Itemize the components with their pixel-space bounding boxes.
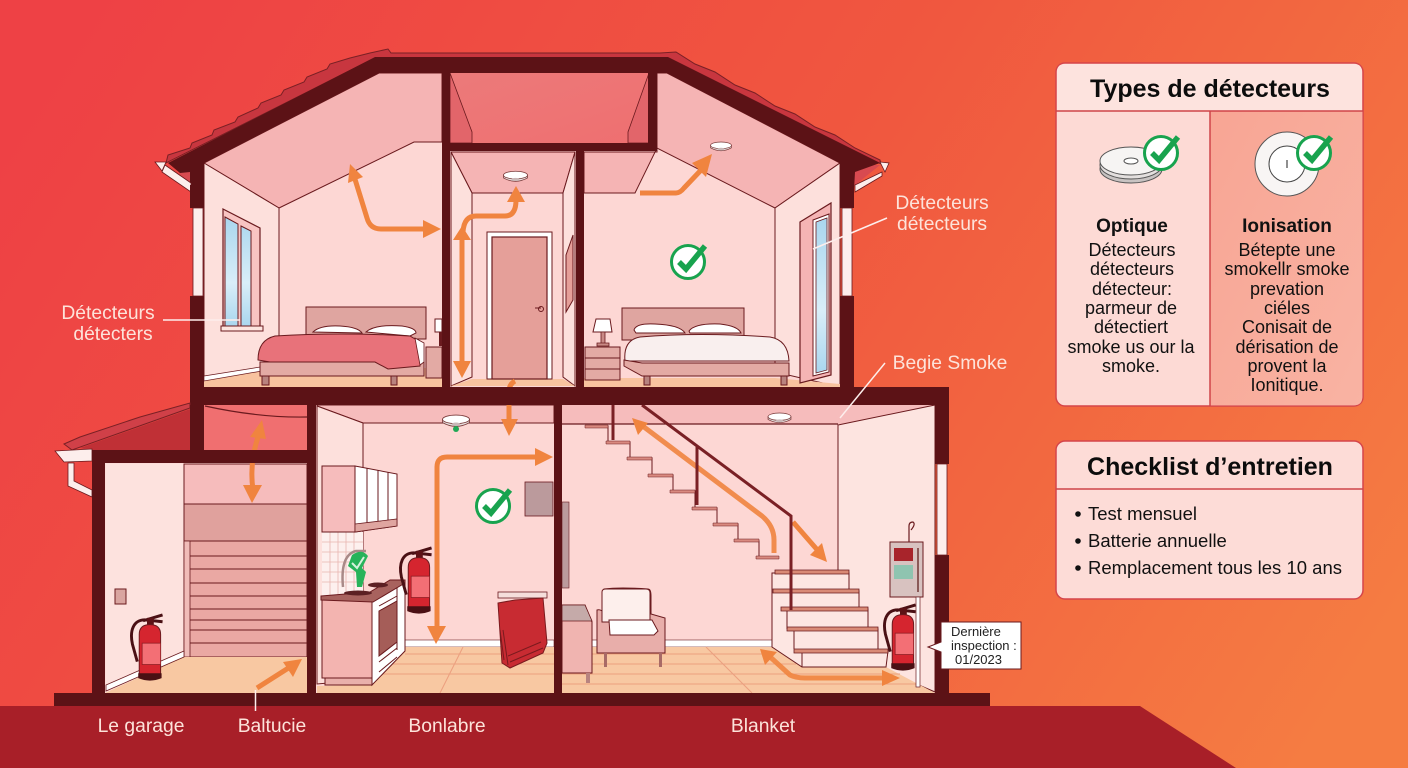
- label: bonlabre: Bonlabre: [408, 716, 486, 737]
- heading background: [1057, 64, 1362, 111]
- smoke detector hallway: [503, 171, 528, 181]
- upper left air flow arrow: [348, 164, 441, 238]
- icon: optical detector: [1100, 136, 1178, 183]
- towel rack and blanket: [498, 592, 547, 668]
- leader line left: [163, 319, 240, 321]
- column text: ionisation: [1224, 216, 1350, 395]
- side unit: [562, 502, 592, 683]
- column text: optique: smoke us our la: [1067, 337, 1196, 357]
- tiles: [322, 532, 363, 598]
- wall box: [525, 482, 553, 516]
- inner walls upper: [442, 60, 657, 387]
- panel: types de détecteurs: [1056, 63, 1363, 406]
- smoke detector living: [768, 413, 791, 423]
- label: baltucie: Baltucie: [238, 716, 306, 737]
- smoke detector right bedroom: [711, 142, 731, 151]
- panel: checklist d'entretien: [1056, 441, 1363, 599]
- gutters: [155, 162, 889, 192]
- column text: optique: smoke.: [1102, 356, 1160, 376]
- hallway: [450, 151, 576, 387]
- roof tiles: [166, 49, 881, 164]
- checklist items: [1075, 503, 1342, 578]
- window left bedroom: [221, 209, 263, 331]
- air flow arrows staircase: [632, 418, 900, 686]
- column text: optique: parmeur de: [1085, 298, 1177, 318]
- bed right: [622, 308, 789, 385]
- column text: ionisation: Bétepte une: [1238, 240, 1336, 260]
- mid slab: [190, 387, 949, 405]
- column text: ionisation: smokellr smoke: [1224, 259, 1350, 279]
- checklist items: Remplacement tous les 10 ans: [1088, 557, 1342, 578]
- column text: ionisation: dérisation de: [1235, 337, 1339, 357]
- attic center: [450, 73, 649, 143]
- stair to kitchen air flow arrow: [501, 381, 518, 436]
- column text: ionisation: ciéles: [1264, 298, 1310, 318]
- ground band: [0, 706, 1236, 768]
- column text: optique: Optique: [1096, 216, 1168, 237]
- green splash: [348, 552, 368, 587]
- right bedroom air flow arrow: [640, 154, 712, 193]
- nightstand and lamp right: [585, 319, 620, 380]
- garage: [105, 463, 307, 693]
- label: garage: Le garage: [98, 716, 184, 737]
- armchair: [597, 588, 665, 667]
- column text: ionisation: provent la: [1247, 356, 1328, 376]
- leader line right: [813, 218, 887, 249]
- leader line baltucie: [254, 690, 256, 711]
- column text: optique: [1067, 216, 1196, 376]
- heading: Types de détecteurs: [1090, 75, 1330, 103]
- foundation slab: [54, 693, 990, 706]
- faucet: [343, 551, 366, 587]
- checklist items: Test mensuel: [1088, 503, 1197, 524]
- garage attic: [204, 405, 307, 451]
- wall cabinets: [322, 466, 397, 532]
- label: blanket: Blanket: [731, 716, 796, 737]
- heading: Checklist d’entretien: [1087, 453, 1333, 481]
- callout: last inspection: inspection :: [951, 638, 1017, 653]
- kitchen base and oven: [321, 580, 405, 685]
- check right bedroom: [672, 246, 705, 278]
- garage gutter: [55, 449, 92, 497]
- garage floor arrow: [257, 659, 302, 688]
- wall outlet: [115, 589, 126, 604]
- callout: last inspection: 01/2023: [955, 652, 1002, 667]
- kitchen air flow arrow: [427, 448, 553, 644]
- extinguisher garage: [131, 615, 163, 681]
- column text: optique: Détecteurs: [1088, 240, 1176, 260]
- label: right detectors: Détecteurs: [895, 193, 989, 214]
- left bedroom: [204, 73, 442, 387]
- garage air flow arrow: [243, 420, 266, 503]
- house structure walls: [54, 49, 990, 706]
- wall left upper: [190, 185, 204, 405]
- kitchen: [316, 405, 554, 693]
- eave undersides: [178, 164, 880, 186]
- extinguisher living: [884, 605, 916, 671]
- check kitchen: [476, 490, 510, 522]
- column text: optique: détecteur:: [1092, 279, 1172, 299]
- bed left: [258, 307, 426, 385]
- column text: ionisation: prevation: [1250, 279, 1324, 299]
- column: ionisation background: [1210, 111, 1362, 405]
- nightstand left: [426, 319, 442, 378]
- column text: optique: détectiert: [1094, 317, 1168, 337]
- garage door: [184, 541, 307, 657]
- column text: ionisation: Ionitique.: [1250, 375, 1324, 395]
- door: [487, 232, 552, 379]
- column text: ionisation: Conisait de: [1242, 317, 1332, 337]
- icon: ionisation detector: [1255, 132, 1331, 196]
- upper staircase: [585, 425, 779, 559]
- lower staircase: [772, 570, 888, 667]
- living room: [562, 405, 935, 693]
- checklist items: Batterie annuelle: [1088, 530, 1227, 551]
- roof frame: [168, 57, 880, 190]
- column text: ionisation: Ionisation: [1242, 216, 1332, 237]
- wall right upper: [840, 185, 854, 405]
- column text: optique: détecteurs: [1090, 259, 1174, 279]
- label: begie smoke: Begie Smoke: [893, 353, 1007, 374]
- leader line begie: [840, 363, 885, 418]
- garage lean-to roof: [80, 409, 190, 451]
- handrail: [613, 405, 791, 610]
- smoke detector kitchen: [443, 415, 469, 432]
- label: left detectors: Détecteurs: [61, 303, 155, 324]
- callout: last inspection: Dernière: [951, 624, 1001, 639]
- label: left detectors: détecters: [73, 324, 153, 345]
- extinguisher kitchen: [400, 548, 432, 614]
- callout: last inspection: [928, 622, 1021, 669]
- fire panel: [890, 522, 923, 597]
- ground floor walls: [92, 405, 949, 693]
- wall picture: [566, 235, 573, 312]
- glazed door right bedroom: [800, 203, 831, 383]
- hallway air flow arrow: [453, 186, 525, 378]
- pipe: [916, 597, 920, 687]
- label: right detectors: détecteurs: [897, 214, 987, 235]
- right bedroom: [584, 73, 840, 387]
